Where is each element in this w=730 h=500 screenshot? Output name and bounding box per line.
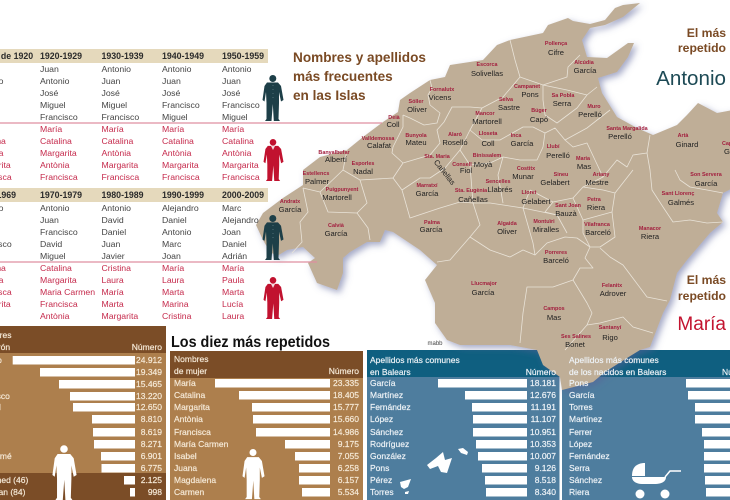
panel: male names: 2.125 xyxy=(141,475,162,485)
table: names by decade, top: Juan xyxy=(40,64,59,74)
panel: female names: Carmen xyxy=(174,487,205,497)
table: names by decade, bottom: Antònia xyxy=(40,311,70,321)
table: names by decade, top: María xyxy=(40,124,62,134)
panel: surnames in Balears: Apellidos más comunes xyxy=(370,355,460,365)
municipality labels: García xyxy=(472,288,495,297)
municipality labels: Gelabert xyxy=(540,178,570,187)
panel: male names: 13.220 xyxy=(136,391,162,401)
table: names by decade, top: Catalina xyxy=(102,136,134,146)
municipality labels: Mas xyxy=(577,162,591,171)
table: names by decade, top: Antònia xyxy=(40,160,70,170)
heading: más frecuentes xyxy=(293,69,393,84)
table: names by decade, bottom: Laura xyxy=(222,311,244,321)
panel: surnames in Balears: 10.007 xyxy=(530,451,556,461)
table: names by decade, top: Miguel xyxy=(162,112,188,122)
municipality labels: Albertí xyxy=(325,155,348,164)
icon: white man xyxy=(52,445,77,500)
municipality labels: Palmer xyxy=(305,177,329,186)
callout: most repeated female name xyxy=(677,273,726,335)
panel: surnames in Balears: 8.518 xyxy=(535,475,556,485)
table: names by decade, top: Margarita xyxy=(102,160,138,170)
municipality labels: mabb xyxy=(427,341,443,347)
municipality labels: Sencelles xyxy=(486,179,510,185)
municipality labels: Ariany xyxy=(593,172,609,178)
panel: surnames in Balears xyxy=(370,355,556,497)
table: names by decade, bottom xyxy=(0,188,317,321)
panel: male names: 12.650 xyxy=(136,402,162,412)
panel: male names: 6.901 xyxy=(141,451,162,461)
municipality labels: Mancor xyxy=(475,111,495,117)
table: names by decade, top: Antònia xyxy=(162,148,192,158)
table: names by decade, bottom: Antonio xyxy=(102,203,131,213)
municipality labels: Sastre xyxy=(498,103,520,112)
table: names by decade, bottom: Daniel xyxy=(102,227,126,237)
table: names by decade, top: Catalina xyxy=(162,136,194,146)
municipality labels: Banyalbufar xyxy=(318,150,350,156)
table: names by decade, top: Francisco xyxy=(162,100,200,110)
municipality labels: Fornalutx xyxy=(430,87,454,93)
municipality labels: Esporles xyxy=(352,161,374,167)
panel: female names: 14.986 xyxy=(333,427,359,437)
municipality labels: Artà xyxy=(678,133,689,139)
municipality labels: Mestre xyxy=(585,178,609,187)
municipality labels: Oliver xyxy=(497,227,517,236)
municipality labels: Coll xyxy=(481,139,495,148)
panel: female names: 6.258 xyxy=(338,463,359,473)
municipality labels: Calafat xyxy=(367,141,392,150)
table: names by decade, bottom: Marc xyxy=(222,203,242,213)
table: names by decade, top: Miguel xyxy=(102,100,127,110)
callout: most repeated female name: repetido xyxy=(678,289,726,303)
panel: female names: Margarita xyxy=(174,402,210,412)
municipality labels: Rigo xyxy=(602,333,618,342)
municipality labels: Estellencs xyxy=(303,171,329,177)
table: names by decade, bottom: 1990-1999 xyxy=(162,190,204,200)
municipality labels: Fiol xyxy=(460,166,472,175)
municipality labels: Alcúdia xyxy=(574,60,595,66)
municipality labels: Mateu xyxy=(405,138,427,147)
panel: female names: Catalina xyxy=(174,390,205,400)
municipality labels: Sant Joan xyxy=(555,203,581,209)
table: names by decade, bottom: Catalina xyxy=(40,263,72,273)
heading: Nombres y apellidos xyxy=(293,50,426,65)
municipality labels: Son Servera xyxy=(690,172,723,178)
table: names by decade, top: Catalina xyxy=(40,136,72,146)
panel: female names: Francisca xyxy=(174,427,211,437)
table: names by decade, bottom: Daniel xyxy=(162,215,187,225)
municipality labels: Lloret xyxy=(522,190,537,196)
municipality labels: Bunyola xyxy=(405,133,428,139)
panel: surnames of those born in Balears: López xyxy=(569,439,592,449)
callout: most repeated male name: Antonio xyxy=(656,67,726,90)
panel: female names: 9.175 xyxy=(338,439,359,449)
table: names by decade, bottom: Marc xyxy=(162,239,182,249)
table: names by decade, bottom: Marta xyxy=(222,287,244,297)
panel: surnames in Balears: Pérez xyxy=(370,475,392,485)
panel: female names: Antònia xyxy=(174,414,203,424)
municipality labels: Petra xyxy=(587,197,602,203)
municipality labels: Muro xyxy=(587,104,601,110)
table: names by decade, bottom: Margarita xyxy=(40,275,77,285)
table: names by decade, top: 1940-1949 xyxy=(162,51,204,61)
table: names by decade, top: Francisca xyxy=(102,172,139,182)
municipality labels: Palma xyxy=(424,220,441,226)
panel: surnames in Balears: Martínez xyxy=(370,390,403,400)
panel: female names: Número xyxy=(329,366,359,376)
panel: surnames in Balears: 11.107 xyxy=(531,414,556,424)
panel: surnames in Balears: 8.340 xyxy=(535,487,556,497)
panel: surnames in Balears: Rodríguez xyxy=(370,439,409,449)
table: names by decade, bottom: Francisco xyxy=(40,227,78,237)
panel: male names: 8.810 xyxy=(141,414,162,424)
panel: female names: 15.660 xyxy=(333,414,359,424)
heading xyxy=(293,50,426,103)
table: names by decade, bottom: Daniel xyxy=(222,239,247,249)
table: names by decade, top: Margarita xyxy=(40,148,77,158)
table: names by decade, bottom: Margarita xyxy=(102,311,138,321)
icon: man, top xyxy=(262,75,284,121)
panel: female names: Magdalena xyxy=(174,475,216,485)
municipality labels: Sineu xyxy=(554,172,568,178)
panel: surnames in Balears: 11.191 xyxy=(531,402,556,412)
heading: en las Islas xyxy=(293,88,366,103)
municipality labels: Capó xyxy=(530,115,548,124)
panel: female names: María xyxy=(174,378,196,388)
municipality labels: García xyxy=(325,229,348,238)
table: names by decade, bottom: María xyxy=(222,263,244,273)
municipality labels: García xyxy=(279,205,302,214)
table: names by decade, bottom: Marta xyxy=(162,287,184,297)
municipality labels: Perelló xyxy=(546,151,570,160)
table: names by decade, bottom: Maria Carmen xyxy=(40,287,95,297)
municipality labels: Campanet xyxy=(514,84,540,90)
municipality labels: Pons xyxy=(521,90,539,99)
panel: surnames in Balears: 10.353 xyxy=(530,439,556,449)
table: names by decade, top: Antònia xyxy=(102,148,131,158)
panel: male names: 15.465 xyxy=(136,379,162,389)
callout: most repeated male name: El más xyxy=(687,26,726,40)
municipality labels: Llucmajor xyxy=(471,281,498,287)
municipality labels: Bonet xyxy=(565,340,586,349)
panel: female names: 5.534 xyxy=(338,487,359,497)
table: names by decade, top: Juan xyxy=(162,76,181,86)
table: names by decade, top: Antonio xyxy=(102,64,131,74)
table: names by decade, bottom: Joan xyxy=(162,251,181,261)
municipality labels: Perelló xyxy=(578,110,602,119)
municipality labels: Alaró xyxy=(448,132,463,138)
panel: female names: Isabel xyxy=(174,451,197,461)
panel: female names xyxy=(170,351,363,500)
panel: surnames of those born in Balears: Riera xyxy=(569,487,590,497)
panel: surnames in Balears: 10.951 xyxy=(530,427,556,437)
panel: surnames of those born in Balears: García xyxy=(569,390,595,400)
municipality labels: Sa Pobla xyxy=(552,93,575,99)
table: names by decade, bottom: 1980-1989 xyxy=(102,190,144,200)
municipality labels: Bauzà xyxy=(555,209,578,218)
table: names by decade, bottom: Joan xyxy=(222,227,241,237)
municipality labels: Barceló xyxy=(585,228,611,237)
table: names by decade, top: Juan xyxy=(222,76,241,86)
panel: female names: María Carmen xyxy=(174,439,229,449)
municipality labels: Inca xyxy=(511,133,522,139)
table: names by decade, bottom: Paula xyxy=(222,275,244,285)
municipality labels: Cañellas xyxy=(432,158,457,187)
callout: most repeated female name: María xyxy=(677,314,726,335)
panel: female names: 23.335 xyxy=(333,378,359,388)
municipality labels: Valldemossa xyxy=(362,136,395,142)
table: names by decade, top: 1930-1939 xyxy=(102,51,144,61)
callout: most repeated male name xyxy=(656,26,726,90)
icon: pram xyxy=(632,463,681,498)
panel: male names: 24.912 xyxy=(136,355,162,365)
panel: male names: 8.271 xyxy=(141,439,162,449)
table: names by decade, bottom: Alejandro xyxy=(222,215,259,225)
table: names by decade, top: Antonio xyxy=(162,64,192,74)
table: names by decade, bottom: Juan xyxy=(102,239,121,249)
municipality labels: Nadal xyxy=(353,167,373,176)
municipality labels: Oliver xyxy=(407,105,427,114)
municipality labels: Vicens xyxy=(429,93,452,102)
panel: surnames of those born in Balears: Apellidos más comunes xyxy=(569,355,659,365)
table: names by decade, bottom: Marina xyxy=(162,299,189,309)
municipality labels: Pollença xyxy=(545,41,568,47)
panel: surnames in Balears: Torres xyxy=(370,487,394,497)
table: names by decade, bottom: Marta xyxy=(102,299,124,309)
table: names by decade, bottom: Alejandro xyxy=(162,203,199,213)
icon: woman, top xyxy=(264,139,283,181)
panel: surnames in Balears: Sánchez xyxy=(370,427,403,437)
panel: male names: 6.775 xyxy=(141,463,162,473)
table: names by decade, top: Francisco xyxy=(222,100,260,110)
municipality labels: Sta. Eugènia xyxy=(455,188,488,194)
municipality labels: Calvià xyxy=(328,223,345,229)
municipality labels: Sta. Maria xyxy=(424,154,451,160)
table: names by decade, bottom: Cristina xyxy=(162,311,192,321)
panel: surnames in Balears: 18.181 xyxy=(530,378,556,388)
panel: female names: Nombres xyxy=(174,354,208,364)
municipality labels: Lloseta xyxy=(479,131,498,137)
table: names by decade, bottom: David xyxy=(40,239,62,249)
municipality labels: Marratxí xyxy=(417,183,438,189)
table: names by decade, bottom: Laura xyxy=(162,275,184,285)
municipality labels: García xyxy=(416,189,439,198)
table: names by decade, top: Antonio xyxy=(222,64,252,74)
municipality labels: García xyxy=(420,225,443,234)
municipality labels: Coll xyxy=(386,120,400,129)
table: names by decade, top: Miguel xyxy=(222,112,248,122)
municipality labels: Algaida xyxy=(497,221,518,227)
municipality labels: Selva xyxy=(499,97,514,103)
callout: most repeated female name: El más xyxy=(687,273,726,287)
municipality labels: Santa Margalida xyxy=(606,126,649,132)
panel: surnames in Balears: 12.676 xyxy=(530,390,556,400)
icon: white woman xyxy=(242,449,265,499)
table: names by decade, top: Catalina xyxy=(222,136,254,146)
table: names by decade, top: Miguel xyxy=(40,100,66,110)
panel: female names: 6.157 xyxy=(338,475,359,485)
panel: surnames in Balears: Fernández xyxy=(370,402,411,412)
table: names by decade, top: Antònia xyxy=(222,148,252,158)
table: names by decade, top: Antonio xyxy=(40,76,70,86)
municipality labels: Martorell xyxy=(322,193,352,202)
panel: surnames of those born in Balears: Ferrer xyxy=(569,427,592,437)
panel: surnames of those born in Balears xyxy=(569,355,730,498)
table: names by decade, bottom: 2000-2009 xyxy=(222,190,264,200)
panel: male names: Número xyxy=(132,342,162,352)
table: names by decade, top: María xyxy=(102,124,124,134)
panel: surnames in Balears: González xyxy=(370,451,406,461)
table: names by decade, top: José xyxy=(222,88,241,98)
municipality labels: Adrover xyxy=(600,289,627,298)
municipality labels: Llabrés xyxy=(488,185,513,194)
municipality labels: Sóller xyxy=(409,99,424,105)
table: names by decade, top: Margarita xyxy=(222,160,259,170)
municipality labels: Binissalem xyxy=(473,153,501,159)
table: names by decade, bottom: María xyxy=(162,263,184,273)
icon: Balearic islands xyxy=(400,448,468,494)
municipality labels: Martorell xyxy=(472,117,502,126)
panel: surnames of those born in Balears: Torres xyxy=(569,402,593,412)
municipality labels: Cañellas xyxy=(458,195,488,204)
panel: surnames in Balears: García xyxy=(370,378,396,388)
panel: female names: de mujer xyxy=(174,366,207,376)
table: names by decade, top: María xyxy=(222,124,244,134)
table: names by decade, bottom: Antonio xyxy=(40,203,70,213)
table: names by decade, top: María xyxy=(162,124,184,134)
municipality labels: Mas xyxy=(547,313,561,322)
table: names by decade, bottom: Cristina xyxy=(102,263,131,273)
municipality labels: Riera xyxy=(587,203,606,212)
municipality labels: Andratx xyxy=(280,199,300,205)
panel: female names: Juana xyxy=(174,463,197,473)
table: names by decade, bottom: 1970-1979 xyxy=(40,190,82,200)
panel: female names: 18.405 xyxy=(333,390,359,400)
table: names by decade, top: José xyxy=(40,88,59,98)
panel: female names: 7.055 xyxy=(338,451,359,461)
table: names by decade, bottom: Adrián xyxy=(222,251,247,261)
municipality labels: García xyxy=(574,66,597,75)
municipality labels: Ginard xyxy=(676,140,698,149)
municipality labels: Ses Salines xyxy=(561,334,591,340)
panel: surnames in Balears: Pons xyxy=(370,463,389,473)
municipality labels: Sant Llorenç xyxy=(662,191,694,197)
panel: surnames in Balears: López xyxy=(370,414,393,424)
panel: surnames in Balears: 9.126 xyxy=(535,463,556,473)
municipality labels: Gelabert xyxy=(521,197,551,206)
municipality labels: Solivellas xyxy=(471,69,503,78)
municipality labels: Santanyí xyxy=(599,325,622,331)
municipality labels: Maria xyxy=(576,156,591,162)
municipality labels: Búger xyxy=(531,108,548,114)
table: names by decade, bottom: Laura xyxy=(102,275,124,285)
municipality labels: Montuïri xyxy=(533,219,555,225)
table: names by decade, bottom: David xyxy=(102,215,124,225)
municipality labels: Miralles xyxy=(533,225,559,234)
municipality labels: Munar xyxy=(512,172,534,181)
panel: female names: 15.777 xyxy=(333,402,359,412)
panel: surnames in Balears: en Balears xyxy=(370,367,411,377)
panel: surnames of those born in Balears: Serra xyxy=(569,463,590,473)
municipality labels: Roselló xyxy=(442,138,468,147)
municipality labels: Consell xyxy=(452,162,472,168)
table: names by decade, top: Margarita xyxy=(162,160,199,170)
panel: male names: 998 xyxy=(148,487,162,497)
callout: most repeated male name: repetido xyxy=(678,41,726,55)
municipality labels: Felanitx xyxy=(602,283,622,289)
table: names by decade, top: Francisco xyxy=(102,112,139,122)
table: names by decade, bottom: Lucía xyxy=(222,299,243,309)
municipality labels: Moyà xyxy=(474,160,493,169)
panel backgrounds: blue surname tables xyxy=(367,350,730,500)
table: names by decade, bottom: María xyxy=(102,287,124,297)
section title: Los diez más repetidos xyxy=(171,334,330,351)
table: names by decade, top: 1920-1929 xyxy=(40,51,82,61)
table: names by decade, top: Francisca xyxy=(40,172,78,182)
municipality labels: García xyxy=(511,139,534,148)
municipality labels: Deià xyxy=(388,115,401,121)
municipality labels: Vilafranca xyxy=(584,222,611,228)
table: names by decade, top xyxy=(0,49,382,182)
municipality labels: Escorca xyxy=(477,62,498,68)
table: names by decade, top: José xyxy=(102,88,120,98)
table: names by decade, bottom: Miguel xyxy=(40,251,66,261)
panel: surnames of those born in Balears: Fernández xyxy=(569,451,610,461)
table: names by decade, top: Francisca xyxy=(222,172,260,182)
municipal boundaries xyxy=(292,40,723,350)
table: names by decade, bottom: Antonio xyxy=(162,227,192,237)
municipality labels: Puigpunyent xyxy=(326,187,359,193)
panel: surnames of those born in Balears: de los nacidos en Balears xyxy=(569,367,666,377)
panel: surnames of those born in Balears: Martínez xyxy=(569,414,602,424)
panel: male names: 19.349 xyxy=(136,367,162,377)
table: names by decade, bottom: Juan xyxy=(40,215,59,225)
map of Mallorca xyxy=(256,3,730,390)
table: names by decade, bottom: Francisca xyxy=(40,299,78,309)
municipality labels: Campos xyxy=(543,306,565,312)
municipality labels: Serra xyxy=(553,99,572,108)
table: names by decade, top: Francisca xyxy=(162,172,200,182)
municipality labels: Porreres xyxy=(545,250,567,256)
municipality labels: Galmés xyxy=(668,198,694,207)
municipality labels: Llubí xyxy=(547,144,560,150)
table: names by decade, top: Francisco xyxy=(40,112,78,122)
panel: surnames in Balears: Número xyxy=(526,367,556,377)
municipality labels: Riera xyxy=(641,232,660,241)
table: names by decade, top: 1950-1959 xyxy=(222,51,264,61)
panel: surnames of those born in Balears: Sánchez xyxy=(569,475,602,485)
municipality labels: Costitx xyxy=(517,166,535,172)
table: names by decade, top: Juan xyxy=(102,76,121,86)
municipality labels: García xyxy=(695,179,718,188)
panel: surnames of those born in Balears: Pons xyxy=(569,378,588,388)
municipality labels xyxy=(279,41,730,349)
municipality labels: Manacor xyxy=(639,226,662,232)
table: names by decade, bottom: Javier xyxy=(102,251,125,261)
panel: male names: 8.619 xyxy=(141,427,162,437)
municipality labels: Perelló xyxy=(608,132,632,141)
municipality labels: Barceló xyxy=(543,256,569,265)
icon: woman, bottom xyxy=(264,277,283,319)
icon: man, bottom xyxy=(262,215,284,260)
panel: male names xyxy=(0,326,166,500)
municipality labels: Cifre xyxy=(548,48,564,57)
table: names by decade, top: José xyxy=(162,88,181,98)
